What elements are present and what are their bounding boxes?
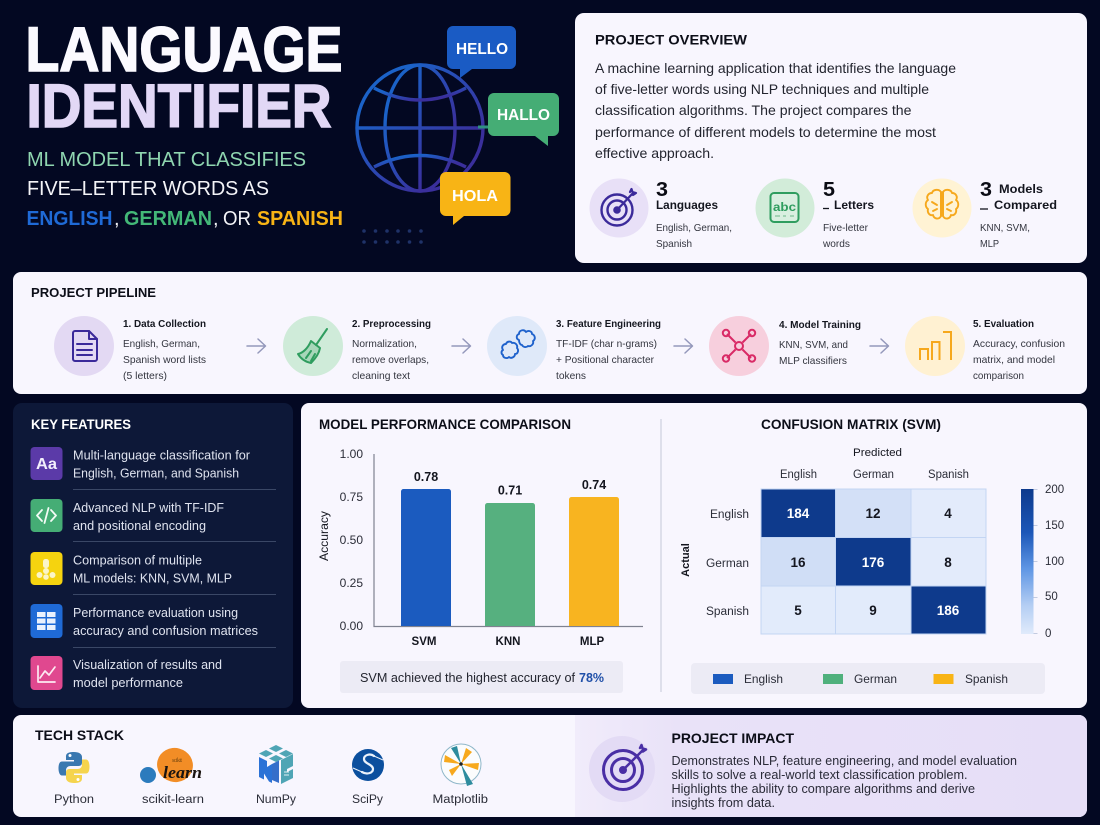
- icon: globe: [357, 65, 483, 191]
- colorbar: 100: [1045, 556, 1064, 568]
- confusion matrix: German: [853, 469, 894, 481]
- arrow: [870, 339, 888, 353]
- step 3: feature engineering: TF-IDF (char n-grams): [556, 338, 657, 350]
- colorbar: [1021, 484, 1064, 640]
- subtitle line 3: ENGLISH: [26, 208, 112, 230]
- panel: project pipeline: [13, 272, 1087, 394]
- stat: letters: Letters: [834, 198, 874, 212]
- colorbar: 0: [1045, 628, 1051, 640]
- subtitle line 3: ,: [213, 208, 219, 230]
- arrow: [452, 339, 470, 353]
- impact paragraph: [672, 754, 1017, 810]
- stat: letters: 5: [823, 179, 835, 201]
- bar chart: 0.75: [340, 490, 363, 504]
- legend: [691, 663, 1045, 694]
- bar chart: [319, 447, 643, 648]
- arrow: [674, 339, 692, 353]
- step 1: data collection: Spanish word lists: [123, 354, 206, 366]
- bar chart: 0.25: [340, 576, 363, 590]
- step 4: model training: MLP classifiers: [779, 355, 847, 367]
- logo: numpy: [256, 745, 296, 806]
- confusion matrix: English: [780, 469, 817, 481]
- overview paragraph: A machine learning application that identifies the language: [595, 60, 956, 76]
- feature: multi-language: [30, 447, 250, 480]
- colorbar: 50: [1045, 591, 1058, 603]
- confusion matrix: 5: [794, 603, 802, 618]
- step 5: evaluation: 5. Evaluation: [973, 318, 1034, 330]
- confusion matrix: Spanish: [928, 469, 969, 481]
- arrow: [247, 339, 266, 353]
- step 4: model training: 4. Model Training: [779, 319, 861, 331]
- feature: comparison: Comparison of multiple: [73, 554, 202, 568]
- logo: scikit-learn: scikit: [172, 758, 182, 764]
- stat: models compared: Compared: [994, 198, 1057, 212]
- bar: SVM: [401, 470, 451, 648]
- stat: models compared: [912, 178, 1057, 250]
- confusion matrix: English: [710, 509, 749, 521]
- confusion matrix: 9: [869, 603, 877, 618]
- impact paragraph: Demonstrates NLP, feature engineering, and model evaluation: [672, 754, 1017, 768]
- legend: German: [854, 672, 897, 686]
- step 1: data collection: 1. Data Collection: [123, 318, 206, 330]
- logo: python: [54, 752, 94, 806]
- subtitle line 3: GERMAN: [124, 208, 212, 230]
- step 5: evaluation: comparison: [973, 370, 1024, 382]
- step 4: model training: [709, 316, 861, 376]
- overview paragraph: [595, 60, 956, 161]
- feature: nlp: Advanced NLP with TF-IDF: [73, 501, 224, 515]
- feature: nlp: and positional encoding: [73, 519, 206, 533]
- bar chart: 0.50: [340, 533, 363, 547]
- feature: visualization: model performance: [73, 676, 183, 690]
- step 2: preprocessing: 2. Preprocessing: [352, 318, 431, 330]
- step 5: evaluation: Accuracy, confusion: [973, 338, 1065, 350]
- icon: target: [589, 736, 655, 802]
- bar: SVM: 0.78: [414, 470, 438, 484]
- stat: letters: Five-letter: [823, 222, 868, 234]
- title block: [26, 15, 343, 230]
- panel: key features: [13, 403, 293, 708]
- confusion matrix: 16: [790, 555, 806, 570]
- bar: KNN: [485, 484, 535, 648]
- heading: model performance comparison: MODEL PERFORMANCE COMPARISON: [319, 416, 571, 432]
- speech bubble: hallo: [478, 93, 559, 146]
- feature: multi-language: Aa: [36, 456, 57, 473]
- confusion matrix: 4: [944, 506, 952, 521]
- overview paragraph: effective approach.: [595, 145, 714, 161]
- bar: KNN: 0.71: [498, 484, 522, 498]
- subtitle line 3: ,: [114, 208, 120, 230]
- stat: letters: abc: [773, 200, 796, 214]
- stat: languages: English, German,: [656, 222, 732, 234]
- heading: project impact: PROJECT IMPACT: [672, 730, 794, 746]
- confusion matrix: 12: [865, 506, 881, 521]
- step 5: evaluation: [905, 316, 1065, 382]
- overview paragraph: of five-letter words using NLP techniques and multiple: [595, 81, 929, 97]
- bar: MLP: 0.74: [582, 478, 606, 492]
- feature: performance evaluation: accuracy and confusion matrices: [73, 624, 258, 638]
- stat: languages: [590, 178, 732, 250]
- subtitle line 2: FIVE–LETTER WORDS AS: [27, 178, 269, 200]
- logo: matplotlib: Matplotlib: [432, 794, 488, 806]
- logo: scikit-learn: scikit-learn: [142, 794, 204, 806]
- step 3: feature engineering: + Positional character: [556, 354, 654, 366]
- stat: models compared: KNN, SVM,: [980, 222, 1030, 234]
- feature: comparison: [30, 552, 232, 586]
- logo: scipy: SciPy: [352, 794, 383, 806]
- step 2: preprocessing: cleaning text: [352, 370, 410, 382]
- logo: matplotlib: [432, 744, 488, 806]
- stat: languages: Spanish: [656, 238, 692, 250]
- stat: letters: words: [822, 238, 850, 250]
- step 5: evaluation: matrix, and model: [973, 354, 1055, 366]
- legend: Spanish: [965, 672, 1008, 686]
- confusion matrix: Spanish: [706, 606, 749, 618]
- confusion matrix: German: [706, 558, 749, 570]
- stat: languages: Languages: [656, 198, 718, 212]
- logo: python: Python: [54, 794, 94, 806]
- heading: tech stack: TECH STACK: [35, 727, 124, 743]
- confusion matrix: 8: [944, 555, 952, 570]
- overview paragraph: performance of different models to determine the most: [595, 124, 936, 140]
- callout: highest accuracy: 78%: [579, 671, 604, 685]
- feature: visualization: Visualization of results and: [73, 658, 222, 672]
- feature: multi-language: English, German, and Spanish: [73, 466, 239, 480]
- bar chart: 0.00: [340, 619, 363, 633]
- feature: multi-language: Multi-language classification for: [73, 448, 250, 462]
- stat: models compared: MLP: [980, 238, 999, 250]
- heading: project pipeline: PROJECT PIPELINE: [31, 285, 156, 300]
- bar: SVM: SVM: [412, 636, 436, 648]
- stat: letters: [756, 178, 874, 250]
- panel: charts: [301, 403, 1087, 708]
- speech bubble: hallo: HALLO: [497, 107, 550, 124]
- feature: nlp: [30, 499, 224, 533]
- speech bubble: hello: [447, 26, 516, 78]
- impact paragraph: Highlights the ability to compare algorithms and derive: [672, 782, 975, 796]
- logo: scipy: [352, 749, 384, 806]
- speech bubble: hola: [440, 172, 510, 225]
- bar: MLP: [569, 478, 619, 648]
- confusion matrix: Actual: [680, 543, 692, 577]
- step 2: preprocessing: Normalization,: [352, 338, 417, 350]
- panel: project impact: [575, 715, 1087, 817]
- confusion matrix: [680, 447, 986, 634]
- bar: MLP: MLP: [580, 636, 604, 648]
- stat: models compared: Models: [999, 182, 1043, 196]
- stat: models compared: 3: [980, 179, 992, 201]
- subtitle line 1: ML MODEL THAT CLASSIFIES: [27, 149, 306, 171]
- bar chart: 1.00: [340, 447, 363, 461]
- panel: tech stack: [13, 715, 1087, 817]
- colorbar: 200: [1045, 484, 1064, 496]
- decorative dots: [362, 229, 423, 244]
- callout: highest accuracy: SVM achieved the highest accuracy of: [360, 671, 576, 685]
- callout: highest accuracy: [340, 661, 623, 693]
- subtitle line 3: [26, 208, 343, 230]
- feature: visualization: [30, 656, 222, 690]
- heading: confusion matrix: CONFUSION MATRIX (SVM): [761, 416, 941, 432]
- stat: languages: 3: [656, 179, 668, 201]
- overview paragraph: classification algorithms. The project compares the: [595, 102, 912, 118]
- feature: performance evaluation: [30, 604, 258, 638]
- heading: key features: KEY FEATURES: [31, 416, 131, 432]
- bar: KNN: KNN: [496, 636, 520, 648]
- bar chart: Accuracy: [319, 511, 331, 561]
- impact paragraph: skills to solve a real-world text classification problem.: [672, 768, 968, 782]
- logo: scikit-learn: [140, 744, 204, 806]
- confusion matrix: 176: [862, 555, 885, 570]
- confusion matrix: 186: [937, 603, 960, 618]
- step 4: model training: KNN, SVM, and: [779, 339, 848, 351]
- step 1: data collection: English, German,: [123, 338, 200, 350]
- subtitle line 3: SPANISH: [257, 208, 343, 230]
- feature: performance evaluation: Performance evaluation using: [73, 606, 238, 620]
- step 1: data collection: (5 letters): [123, 370, 167, 382]
- colorbar: 150: [1045, 520, 1064, 532]
- speech bubble: hola: HOLA: [452, 188, 498, 205]
- heading: project overview: PROJECT OVERVIEW: [595, 32, 748, 48]
- subtitle line 3: OR: [223, 208, 251, 230]
- speech bubble: hello: HELLO: [456, 41, 508, 58]
- confusion matrix: Predicted: [853, 447, 902, 459]
- step 2: preprocessing: remove overlaps,: [352, 354, 429, 366]
- step 2: preprocessing: [283, 316, 431, 382]
- logo: numpy: NumPy: [256, 794, 296, 806]
- confusion matrix: 184: [787, 506, 810, 521]
- step 3: feature engineering: [487, 316, 661, 382]
- panel: project overview: [575, 13, 1087, 263]
- step 3: feature engineering: 3. Feature Engineering: [556, 318, 661, 330]
- title: Identifier: IDENTIFIER: [26, 72, 332, 140]
- impact paragraph: insights from data.: [672, 796, 775, 810]
- feature: comparison: ML models: KNN, SVM, MLP: [73, 572, 232, 586]
- step 1: data collection: [54, 316, 206, 382]
- legend: English: [744, 672, 783, 686]
- logo: scikit-learn: learn: [163, 763, 202, 782]
- title: Language: LANGUAGE: [26, 15, 342, 85]
- step 3: feature engineering: tokens: [556, 370, 586, 382]
